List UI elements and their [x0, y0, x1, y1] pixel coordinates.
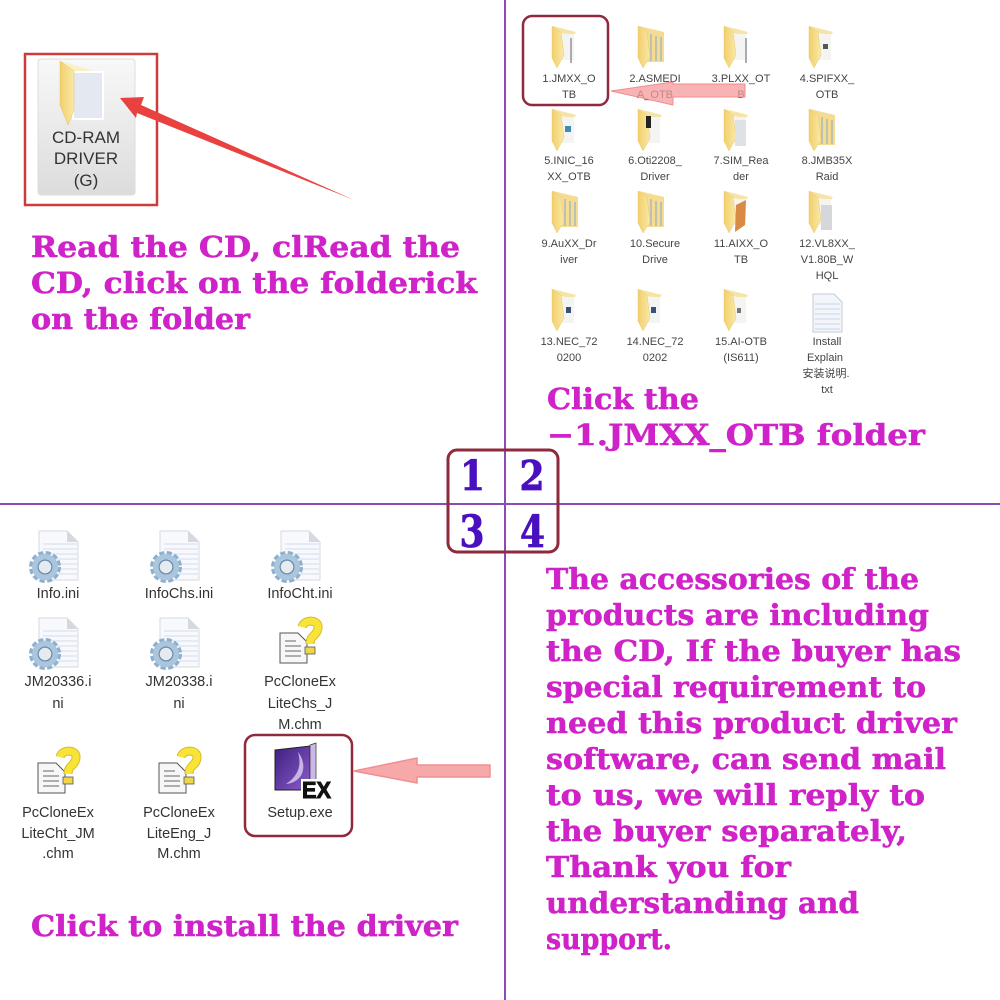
file labels: ni — [173, 696, 185, 712]
file labels: .chm — [42, 846, 74, 862]
highlight: setup.exe: Setup.exe — [267, 805, 333, 821]
folder labels: Explain — [807, 352, 843, 364]
icon: text file — [813, 294, 842, 332]
file labels: LiteChs_J — [268, 696, 332, 712]
file labels: Info.ini — [37, 586, 79, 602]
arrow: points to first folder — [611, 82, 745, 105]
folder labels: 0202 — [643, 352, 667, 364]
folder labels: HQL — [816, 270, 838, 282]
file labels: LiteEng_J — [147, 826, 211, 842]
panel 4: notes text: The accessories of the — [546, 562, 919, 596]
folder labels: 4.SPIFXX_ — [800, 73, 855, 85]
folder labels: 12.VL8XX_ — [799, 238, 856, 250]
folder labels: iver — [560, 254, 578, 266]
folder labels: Drive — [642, 254, 668, 266]
folder labels: B — [737, 89, 745, 101]
arrow: points to drive — [120, 97, 354, 200]
folder labels: 13.NEC_72 — [541, 336, 597, 348]
heading: read the CD: on the folder — [31, 302, 251, 336]
folder labels: 14.NEC_72 — [627, 336, 683, 348]
folder labels — [541, 73, 856, 396]
step number box: 4 — [520, 507, 545, 558]
panel 4: notes text: support. — [546, 922, 672, 956]
panel 4: notes text: special requirement to — [546, 670, 926, 704]
icon: CD-RAM DRIVER drive tile: CD-RAM — [52, 128, 120, 147]
panel 4: notes text: to us, we will reply to — [546, 778, 925, 812]
file labels: M.chm — [278, 717, 322, 733]
icon: CD-RAM DRIVER drive tile — [25, 54, 157, 205]
icon grid: files — [31, 531, 320, 793]
highlight: first folder — [523, 16, 608, 105]
file labels: LiteCht_JM — [21, 826, 95, 842]
folder labels: Raid — [816, 171, 838, 183]
file labels: ni — [52, 696, 64, 712]
file labels: JM20338.i — [146, 674, 212, 690]
highlight: setup.exe — [245, 735, 352, 836]
folder labels: Install — [813, 336, 841, 348]
heading: install: Click to install the driver — [31, 909, 459, 943]
folder labels: (IS611) — [723, 352, 759, 364]
step number box: 1 — [460, 452, 485, 500]
file labels: PcCloneEx — [264, 674, 337, 690]
heading: read the CD: CD, click on the folderick — [31, 266, 478, 300]
folder labels: 6.Oti2208_ — [628, 155, 683, 167]
step number box: 2 — [520, 452, 544, 500]
panel 3: driver files — [21, 531, 490, 943]
file labels: PcCloneEx — [22, 805, 95, 821]
file labels — [21, 586, 337, 862]
panel 4: notes text: products are including — [546, 598, 929, 632]
folder labels: 7.SIM_Rea — [713, 155, 769, 167]
heading: click the folder: Click the — [547, 382, 699, 416]
file labels: InfoChs.ini — [145, 586, 213, 602]
folder labels: XX_OTB — [547, 171, 591, 183]
folder labels: Driver — [640, 171, 670, 183]
folder labels: 10.Secure — [630, 238, 680, 250]
icon: CD-RAM DRIVER drive tile: DRIVER — [54, 149, 118, 168]
panel 4: notes text: the CD, If the buyer has — [546, 634, 961, 668]
folder labels: 8.JMB35X — [802, 155, 853, 167]
panel 4: notes text: software, can send mail — [546, 742, 946, 776]
folder labels: 0200 — [557, 352, 581, 364]
folder labels: der — [733, 171, 749, 183]
folder labels: 安装说明. — [802, 366, 850, 380]
folder labels: TB — [562, 89, 576, 101]
step number box — [448, 450, 558, 558]
icon: CD-RAM DRIVER drive tile: (G) — [74, 171, 98, 190]
heading: click the folder: −1.JMXX_OTB folder — [547, 418, 926, 452]
folder labels: OTB — [816, 89, 838, 101]
folder labels: 2.ASMEDI — [629, 73, 681, 85]
folder labels: txt — [821, 384, 833, 396]
folder labels: 15.AI-OTB — [715, 336, 767, 348]
file labels: M.chm — [157, 846, 201, 862]
panel 4: notes text: Thank you for — [546, 850, 792, 884]
folder labels: 1.JMXX_O — [542, 73, 596, 85]
panel 4: notes text: understanding and — [546, 886, 859, 920]
folder labels: 9.AuXX_Dr — [541, 238, 597, 250]
step number box: 3 — [460, 507, 484, 558]
heading: click the folder — [547, 382, 926, 452]
icon grid: folders — [552, 26, 835, 331]
file labels: InfoCht.ini — [267, 586, 333, 602]
folder labels: TB — [734, 254, 748, 266]
folder labels: A_OTB — [637, 89, 673, 101]
panel 4: notes text — [546, 562, 961, 956]
heading: read the CD: Read the CD, clRead the — [31, 230, 460, 264]
heading: read the CD — [31, 230, 478, 336]
file labels: JM20336.i — [25, 674, 91, 690]
panel 2: driver folder list — [523, 16, 926, 452]
folder labels: V1.80B_W — [801, 254, 854, 266]
panel 4: notes text: the buyer separately, — [546, 814, 907, 848]
folder labels: 3.PLXX_OT — [712, 73, 771, 85]
folder labels: 5.INIC_16 — [544, 155, 594, 167]
file labels: PcCloneEx — [143, 805, 216, 821]
arrow: points to setup — [354, 758, 490, 783]
icon: setup: EX — [302, 777, 332, 803]
folder labels: 11.AIXX_O — [714, 238, 769, 250]
panel 4: notes text: need this product driver — [546, 706, 958, 740]
panel 1: open the CD drive — [25, 54, 478, 336]
